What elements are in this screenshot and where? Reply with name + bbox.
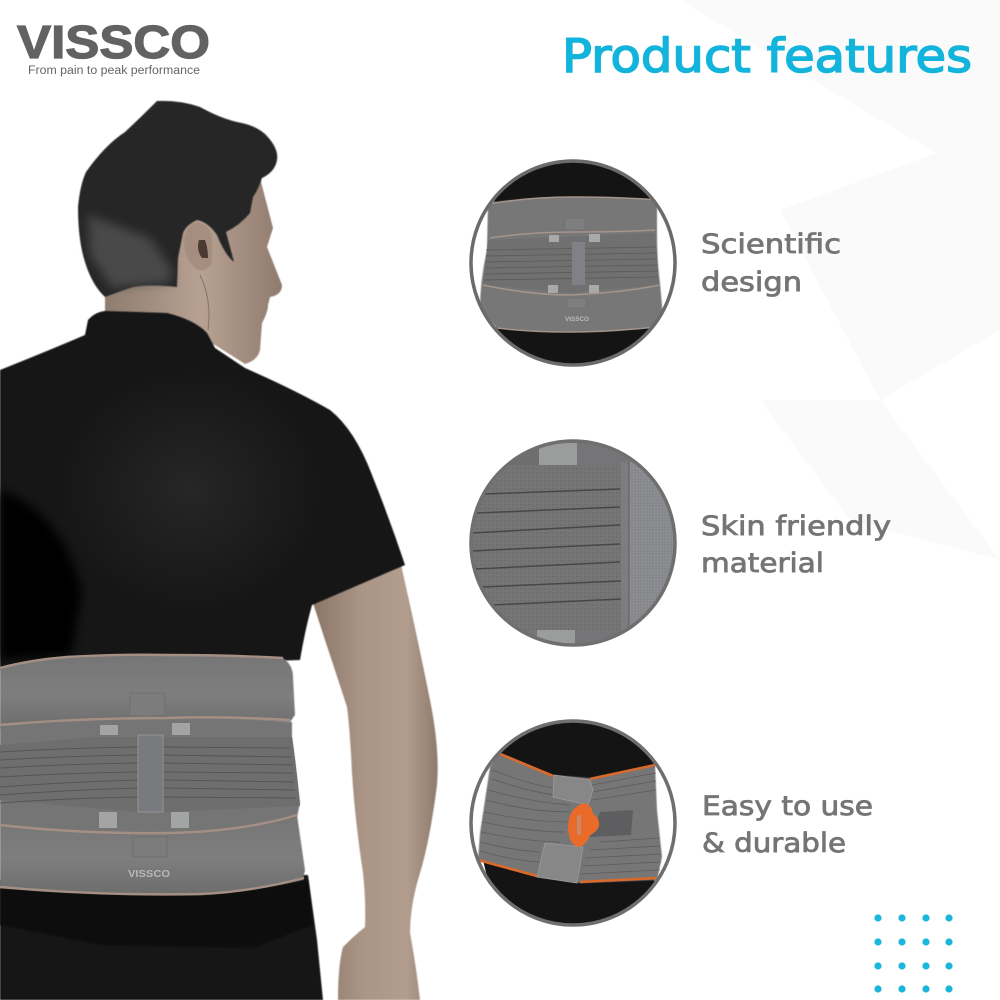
shirt shadow xyxy=(0,490,82,660)
hair xyxy=(78,101,277,297)
belt: center velcro tab xyxy=(138,735,163,812)
photo: man wearing back support belt xyxy=(0,101,438,1000)
ear xyxy=(184,222,212,270)
shirt xyxy=(0,311,405,670)
feature label: scientific design: design xyxy=(701,267,802,298)
feature circle: skin friendly fabric xyxy=(465,435,683,651)
feature label: easy to use and durable: Easy to use xyxy=(702,791,873,822)
velcro strip xyxy=(630,462,674,626)
stitched edge xyxy=(621,462,629,632)
logo: Vissco: VISSCO xyxy=(17,16,210,68)
background pattern xyxy=(680,0,1000,560)
neck and face xyxy=(105,178,282,364)
waistband xyxy=(0,880,313,948)
closure flap lower xyxy=(537,843,583,883)
feature label: skin friendly material: Skin friendly xyxy=(701,511,891,542)
feature label: scientific design: Scientific xyxy=(701,229,841,260)
rib lines xyxy=(480,770,661,874)
feature label: skin friendly material: material xyxy=(701,548,824,579)
black garment xyxy=(501,722,655,779)
belt: upper band xyxy=(0,655,295,729)
stays xyxy=(539,443,577,465)
feature circle: belt overview xyxy=(465,155,681,372)
belt: hook tabs xyxy=(130,693,167,857)
shirt highlight xyxy=(60,370,320,610)
feature label: scientific design xyxy=(701,229,841,298)
belt: seams xyxy=(0,655,304,894)
top and bottom backing xyxy=(465,435,539,465)
feature circle: belt overview: VISSCO xyxy=(565,317,589,323)
belt: elastic straps xyxy=(0,737,300,812)
belt: middle panel xyxy=(0,718,300,833)
black garment above and below xyxy=(494,162,651,364)
belt: metal stays xyxy=(99,723,190,828)
logo: Vissco: From pain to peak performance xyxy=(28,65,200,77)
orange piping xyxy=(478,753,657,882)
feature circle: easy to use xyxy=(465,715,681,931)
closure flap upper xyxy=(553,775,593,805)
feature label: skin friendly material xyxy=(701,511,891,579)
belt: lower band xyxy=(0,815,305,895)
belt: brand mark: VISSCO xyxy=(128,868,170,880)
hair highlights xyxy=(88,215,172,288)
hook strap xyxy=(590,810,633,837)
orange knob xyxy=(568,803,599,847)
neck crease xyxy=(200,275,209,330)
arm xyxy=(312,560,438,1000)
feature label: easy to use and durable: & durable xyxy=(702,828,846,859)
title: Product features xyxy=(562,29,972,83)
belt body xyxy=(478,753,662,883)
belt body xyxy=(480,197,663,332)
trousers xyxy=(0,875,323,1000)
elastic lines xyxy=(472,489,621,605)
velcro xyxy=(572,242,585,285)
elastic panel xyxy=(486,240,658,278)
decorative dot grid xyxy=(874,914,953,993)
feature label: easy to use and durable xyxy=(702,791,873,859)
